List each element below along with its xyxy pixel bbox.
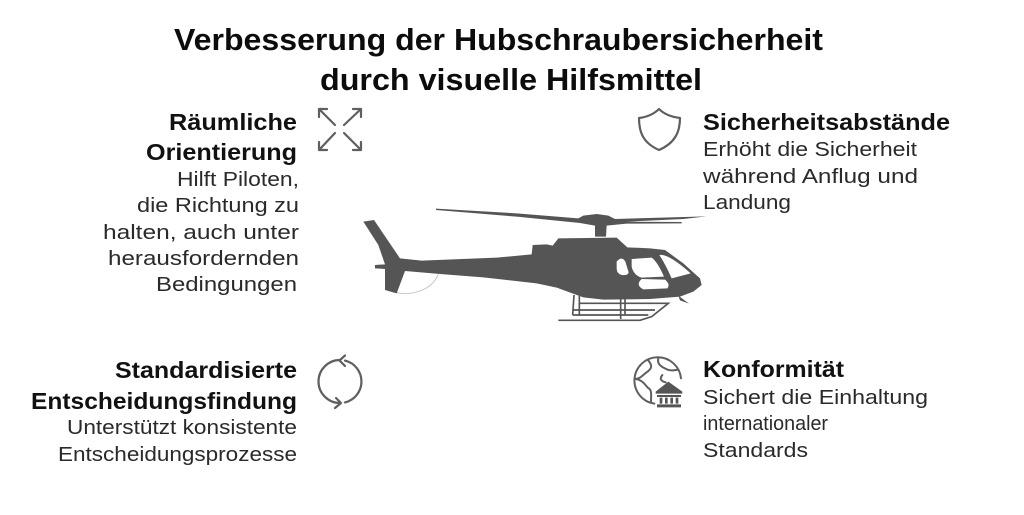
text: Konformität description: internationaler — [703, 413, 828, 435]
panel: Räumliche Orientierung — [103, 109, 299, 296]
text: Räumliche Orientierung description — [103, 169, 299, 296]
text: Konformität description: Sichert die Einhaltung — [703, 387, 928, 409]
panel: Standardisierte Entscheidungsfindung — [31, 357, 297, 466]
text: Standardisierte Entscheidungsfindung description — [58, 417, 297, 466]
text: Räumliche Orientierung description: Hilft Piloten, — [177, 169, 299, 191]
text: Sicherheitsabstände description: Landung — [703, 192, 791, 214]
nose probe — [678, 296, 689, 304]
text: Sicherheitsabstände description: Erhöht die Sicherheit — [703, 139, 918, 161]
icon: circular arrows — [318, 356, 361, 408]
text: Standardisierte Entscheidungsfindung description: Entscheidungsprozesse — [58, 444, 297, 466]
text: Konformität description — [703, 387, 928, 462]
title: Verbesserung der Hubschraubersicherheit — [174, 22, 823, 57]
text: Räumliche Orientierung description: Bedingungen — [156, 274, 297, 296]
text: Sicherheitsabstände description — [702, 139, 918, 214]
panel: Sicherheitsabstände — [702, 109, 950, 214]
heading: Standardisierte Entscheidungsfindung — [31, 357, 297, 414]
heading: Räumliche Orientierung: Orientierung — [146, 139, 297, 165]
icon: shield — [639, 109, 680, 150]
heading: Konformität: Konformität — [703, 356, 844, 382]
text: Räumliche Orientierung description: halten, auch unter — [103, 222, 299, 244]
fuselage — [363, 220, 702, 300]
tail rotor guard — [397, 274, 438, 293]
panel: Konformität — [703, 356, 928, 462]
globe — [634, 357, 681, 404]
main rotor — [436, 209, 707, 237]
heading: Räumliche Orientierung — [146, 109, 297, 165]
text: Sicherheitsabstände description: während Anflug und — [702, 166, 918, 188]
institution building — [656, 382, 682, 407]
icon: globe with institution building — [634, 357, 682, 407]
title — [174, 22, 823, 97]
landing skids — [558, 295, 668, 320]
heading: Standardisierte Entscheidungsfindung: Entscheidungsfindung — [31, 388, 297, 414]
heading: Räumliche Orientierung: Räumliche — [169, 109, 297, 135]
helicopter silhouette — [363, 209, 707, 320]
heading: Sicherheitsabstände: Sicherheitsabstände — [703, 109, 950, 135]
text: Konformität description: Standards — [703, 440, 808, 462]
text: Standardisierte Entscheidungsfindung description: Unterstützt konsistente — [67, 417, 297, 439]
text: Räumliche Orientierung description: herausfordernden — [108, 248, 299, 270]
heading: Standardisierte Entscheidungsfindung: Standardisierte — [115, 357, 297, 383]
icon: expanding arrows — [319, 109, 361, 150]
text: Räumliche Orientierung description: die Richtung zu — [137, 195, 299, 217]
title: durch visuelle Hilfsmittel — [320, 62, 702, 97]
